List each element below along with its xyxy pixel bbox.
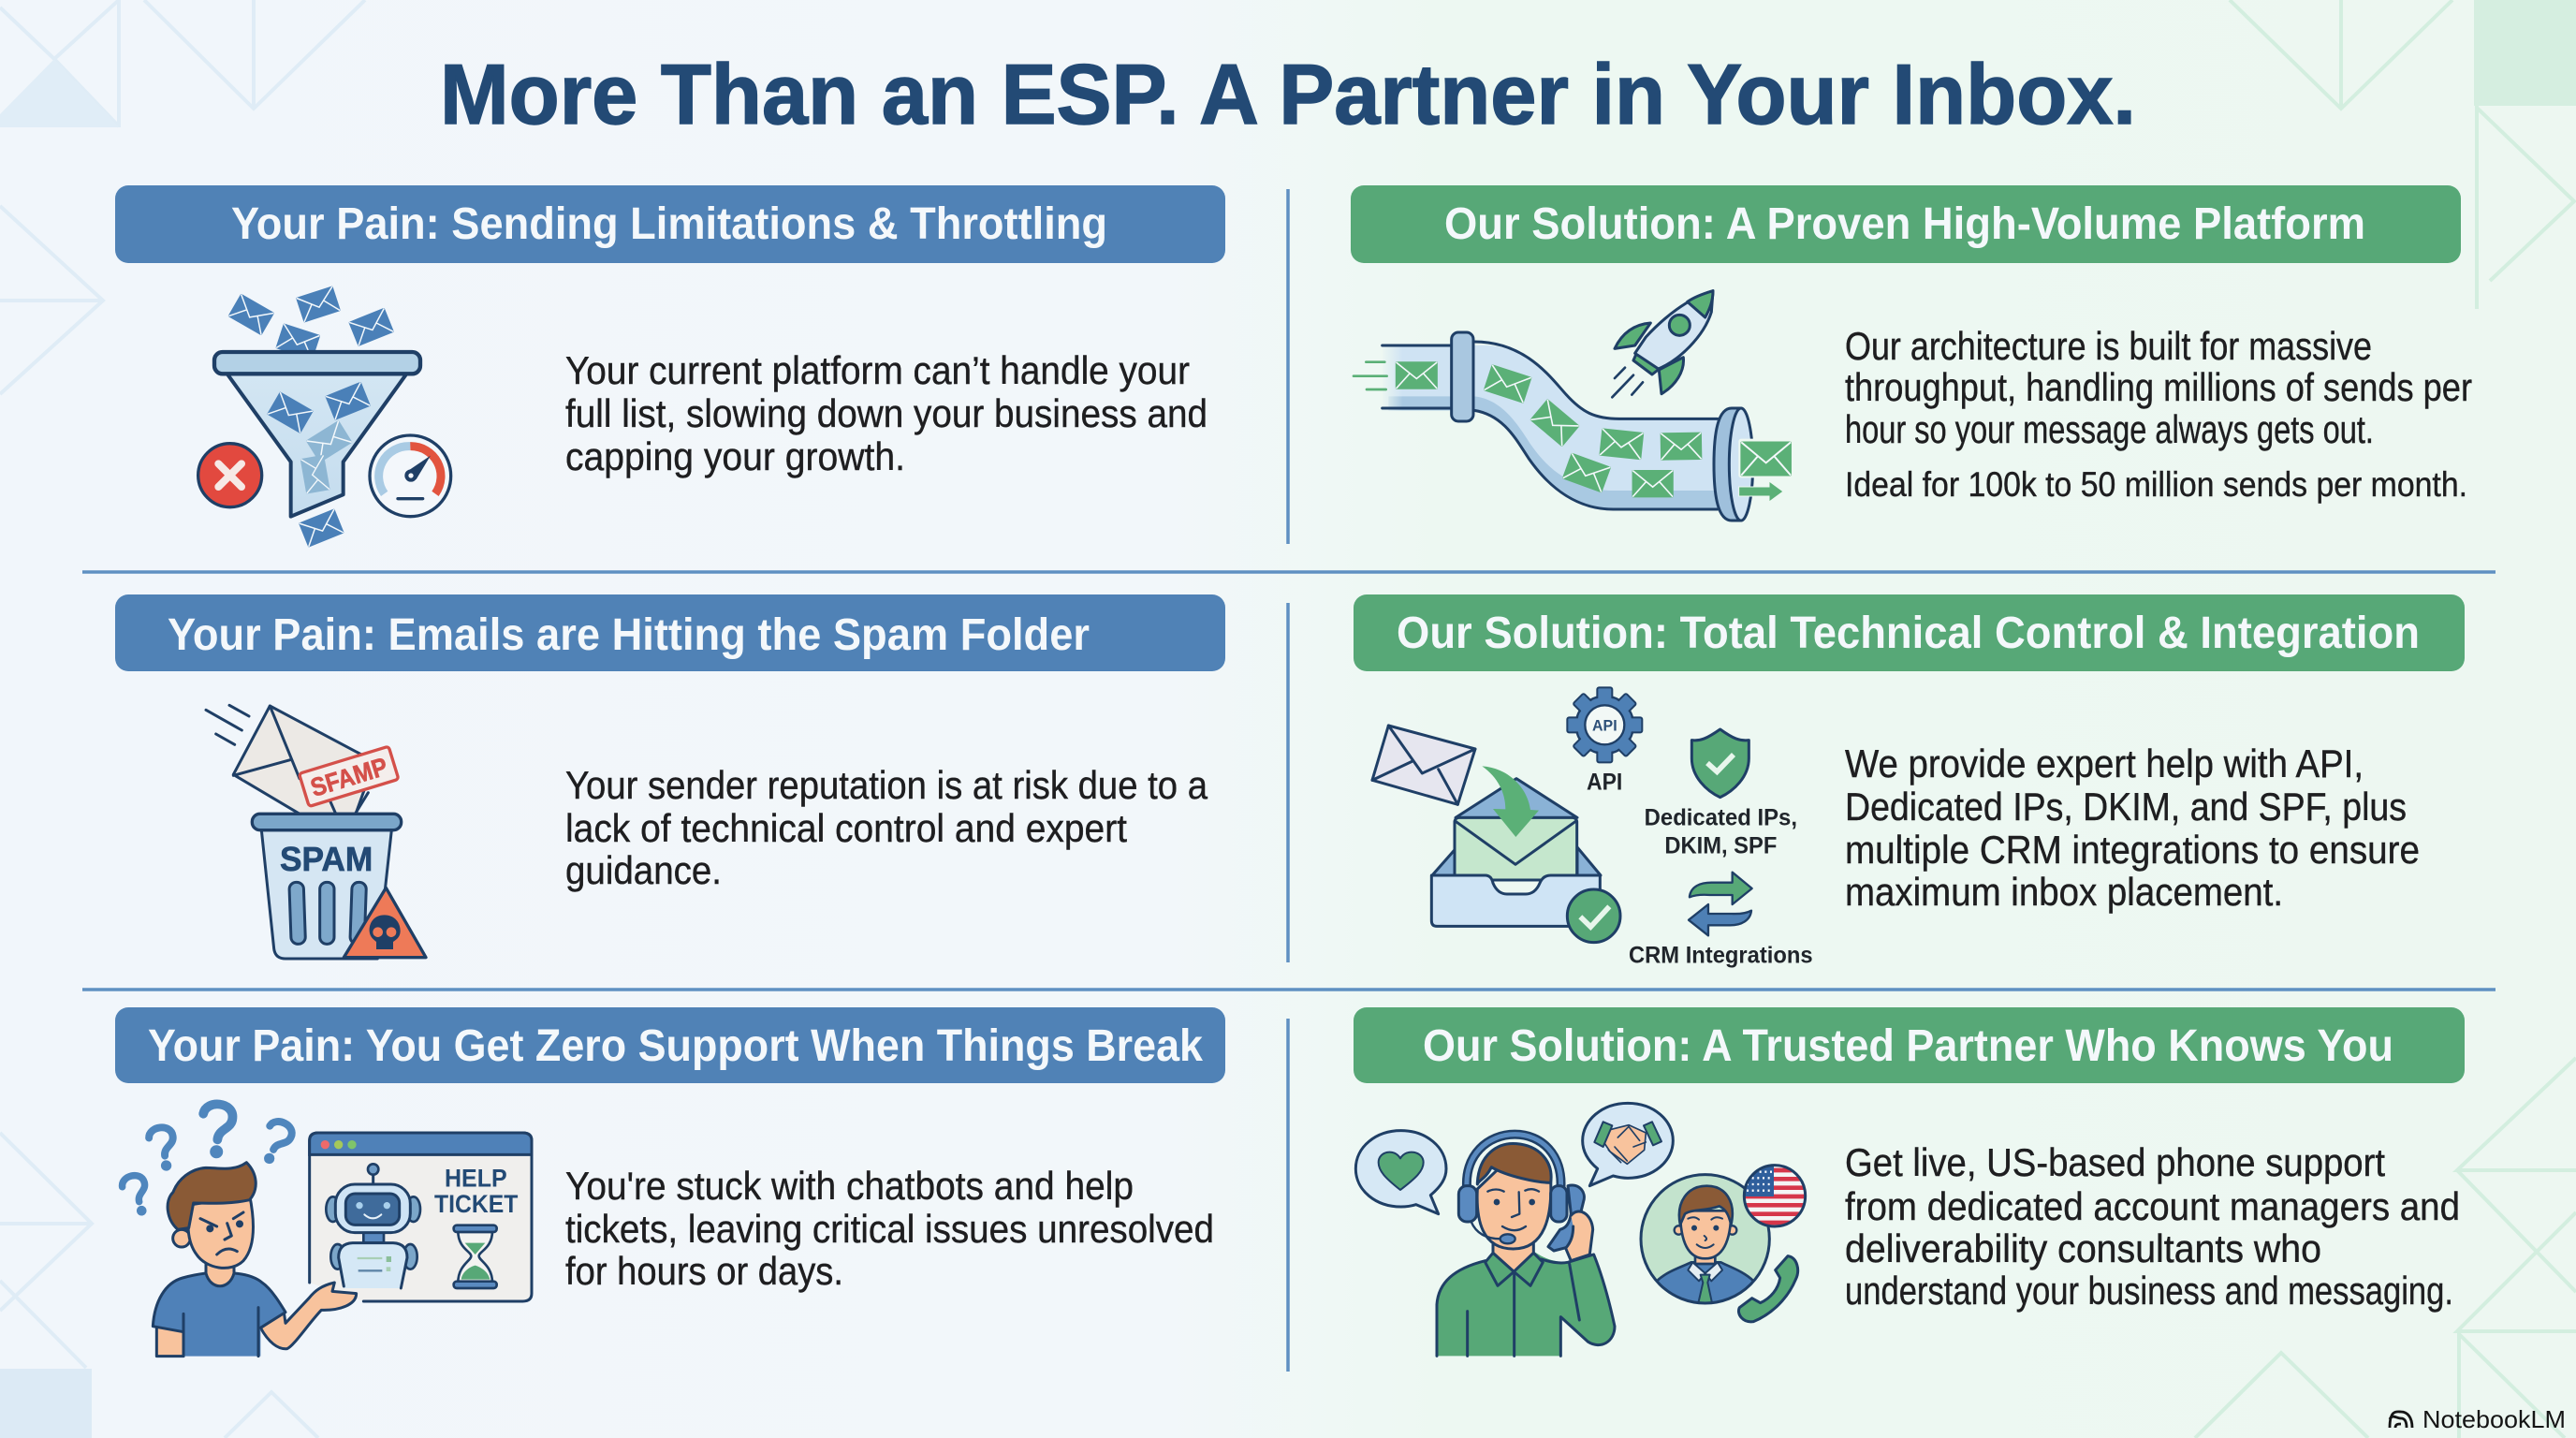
text block: pain 1: Your current platform can’t handle your [565, 348, 1190, 392]
warning triangle with skull [344, 888, 426, 958]
panel header: solution 2 [1354, 594, 2465, 671]
text block: solution 2: Dedicated IPs, DKIM, and SPF, plus [1845, 785, 2407, 829]
panel header: pain 3 [115, 1007, 1225, 1083]
agent [1437, 1135, 1615, 1356]
robot [326, 1164, 420, 1288]
help ticket window [310, 1133, 532, 1301]
text block: solution 2: We provide expert help with API, [1845, 741, 2364, 785]
person [153, 1163, 357, 1357]
text block: solution 3: deliverability consultants who [1845, 1226, 2321, 1270]
text block: solution 3: Get live, US-based phone support [1845, 1140, 2385, 1184]
question marks [120, 1103, 295, 1219]
label: Dedicated IPs, DKIM, SPF: DKIM, SPF [1664, 834, 1777, 859]
icon: shield [1691, 729, 1749, 798]
text block: pain 2: guidance. [565, 848, 722, 892]
text block: pain 3: for hours or days. [565, 1249, 843, 1293]
title: More Than an ESP. A Partner in Your Inbox. [440, 48, 2136, 142]
icon: spam bin with envelope [206, 705, 426, 959]
client portrait [1641, 1175, 1769, 1304]
hourglass [454, 1225, 497, 1288]
icon: funnel with throttled envelopes [198, 286, 451, 548]
panel header: solution 3 [1354, 1007, 2465, 1083]
text block: solution 1: throughput, handling millions of sends per [1845, 365, 2472, 409]
text block: solution 1: Our architecture is built for massive [1845, 324, 2372, 368]
panel header: pain 1: Your Pain: Sending Limitations & Throttling [231, 199, 1107, 249]
pipe [1381, 332, 1753, 521]
section dividers [82, 189, 2496, 1372]
background envelope pattern: right [2195, 0, 2576, 1438]
text block: solution 2: multiple CRM integrations to ensure [1845, 828, 2420, 872]
icon: rocket [1612, 291, 1713, 397]
icon: sync arrows [1689, 873, 1752, 935]
text block: pain 2 [565, 763, 1208, 892]
text block: solution 3: from dedicated account managers and [1845, 1184, 2460, 1228]
icon: frustrated person with help ticket window [120, 1103, 532, 1357]
panel header: pain 3: Your Pain: You Get Zero Support When Things Break [148, 1021, 1203, 1071]
text block: pain 3 [565, 1164, 1214, 1293]
text block: pain 1: capping your growth. [565, 434, 905, 478]
speech bubble: heart [1355, 1131, 1446, 1214]
text block: solution 1: Ideal for 100k to 50 million sends per month. [1845, 465, 2467, 504]
text block: solution 2 [1845, 741, 2420, 914]
text block: pain 3: You're stuck with chatbots and help [565, 1164, 1134, 1208]
icon: API gear: API [1592, 716, 1617, 734]
icon: speed gauge [370, 435, 451, 517]
panel header: pain 2: Your Pain: Emails are Hitting the Spam Folder [168, 610, 1090, 660]
icon: US flag [1744, 1166, 1807, 1226]
icon: red cross [198, 444, 262, 507]
icon: API gear [1567, 687, 1642, 762]
stamp: SFAMP [307, 752, 391, 802]
text block: solution 1: hour so your message always gets out. [1845, 407, 2374, 451]
label: Dedicated IPs, DKIM, SPF [1645, 806, 1797, 859]
speech bubble: handshake [1583, 1103, 1673, 1186]
label: Dedicated IPs, DKIM, SPF: Dedicated IPs, [1645, 806, 1797, 831]
label: CRM Integrations: CRM Integrations [1629, 943, 1813, 968]
text block: solution 3: understand your business and messaging. [1845, 1269, 2453, 1313]
text block: pain 1 [565, 348, 1208, 478]
background envelope pattern: left [0, 0, 365, 1438]
label: API: API [1587, 770, 1622, 795]
icon: spam bin with envelope: SPAM [280, 841, 373, 878]
text block: solution 1 [1845, 324, 2472, 504]
envelope [1372, 726, 1475, 804]
icon: phone handset [1738, 1256, 1798, 1322]
text block: solution 3 [1845, 1140, 2460, 1313]
text block: pain 1: full list, slowing down your business and [565, 391, 1208, 435]
panel header: pain 2 [115, 594, 1225, 671]
text block: pain 2: lack of technical control and expert [565, 806, 1127, 850]
icon: support agent, client and US flag [1355, 1103, 1807, 1356]
panel header: solution 3: Our Solution: A Trusted Partner Who Knows You [1423, 1021, 2393, 1071]
panel header: solution 2: Our Solution: Total Technical Control & Integration [1397, 609, 2420, 658]
text block: pain 2: Your sender reputation is at risk due to a [565, 763, 1208, 807]
panel header: pain 1 [115, 185, 1225, 263]
panel header: solution 1: Our Solution: A Proven High-Volume Platform [1444, 199, 2365, 249]
text block: solution 2: maximum inbox placement. [1845, 870, 2283, 914]
icon: high-volume pipe with rocket [1354, 291, 1794, 521]
panel header: solution 1 [1351, 185, 2461, 263]
text block: pain 3: tickets, leaving critical issues unresolved [565, 1207, 1214, 1251]
icon: inbox with tech labels [1372, 687, 1813, 968]
inbox tray [1431, 766, 1620, 943]
help ticket window: TICKET [434, 1190, 518, 1218]
NotebookLM logo: NotebookLM [2422, 1405, 2566, 1433]
help ticket window: HELP [445, 1164, 507, 1192]
